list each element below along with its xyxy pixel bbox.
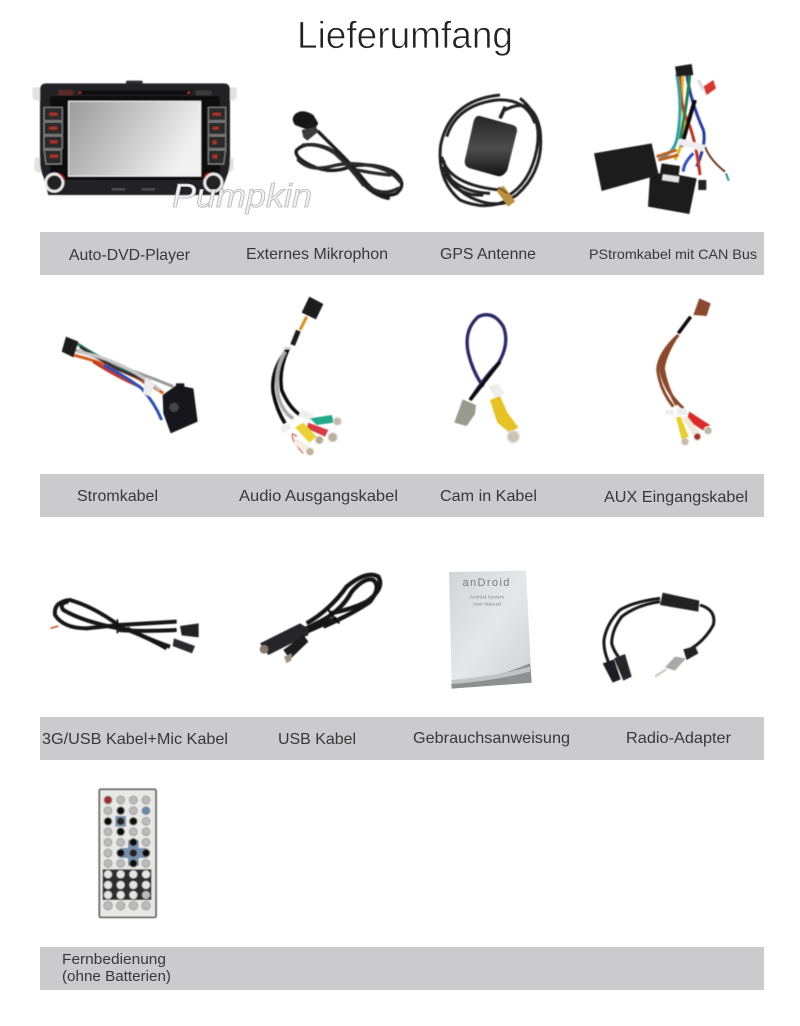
icon: AUX Eingangskabel — [658, 298, 712, 445]
label: 3G/USB Kabel+Mic Kabel: 3G/USB Kabel+Mic Kabel — [42, 731, 228, 748]
icon: 3G/USB cable and mic cable — [51, 600, 199, 653]
manual subtitle: User Manual — [473, 601, 501, 607]
icon: user manual booklet — [449, 571, 532, 689]
label: PStromkabel mit CAN Bus: PStromkabel mit CAN Bus — [589, 246, 757, 262]
icon: Cam in Kabel — [454, 315, 519, 443]
label: Gebrauchsanweisung: Gebrauchsanweisung — [413, 730, 570, 747]
manual subtitle: Android System — [469, 595, 504, 601]
panel: row 3 label bar — [40, 717, 764, 760]
icon: remote control — [99, 789, 156, 917]
icon: external microphone — [293, 111, 402, 198]
icon: car DVD player — [33, 81, 237, 195]
watermark: Pumpkin logo: Pumpkin — [172, 177, 312, 214]
title: Lieferumfang — [297, 15, 513, 57]
label: Fernbedienung (ohne Batterien): (ohne Batterien) — [62, 968, 171, 985]
icon: GPS antenne — [440, 95, 541, 206]
label: Audio Ausgangskabel: Audio Ausgangskabel — [239, 488, 398, 505]
icon: Stromkabel — [62, 337, 198, 433]
icon: power cable with CAN bus — [594, 64, 729, 214]
label: Radio-Adapter: Radio-Adapter — [626, 730, 732, 747]
label: Fernbedienung (ohne Batterien): Fernbedienung — [62, 951, 166, 968]
panel: row 4 label bar — [40, 947, 764, 990]
label: GPS Antenne: GPS Antenne — [440, 246, 536, 263]
left and right buttons — [44, 107, 226, 164]
label: USB Kabel: USB Kabel — [278, 731, 356, 748]
manual cover text: anDroid — [462, 577, 511, 589]
volume and tune knobs — [44, 173, 223, 193]
panel: row 1 label bar — [40, 232, 764, 275]
icon: Audio Ausgangskabel — [273, 297, 341, 455]
icon: radio adapter — [603, 593, 714, 683]
label: Cam in Kabel: Cam in Kabel — [440, 488, 537, 505]
remote buttons — [104, 796, 150, 910]
label: Auto-DVD-Player: Auto-DVD-Player — [69, 247, 191, 264]
label: Stromkabel: Stromkabel — [77, 488, 158, 505]
icon: USB cable — [260, 575, 380, 663]
label: Externes Mikrophon: Externes Mikrophon — [246, 246, 388, 263]
label: AUX Eingangskabel: AUX Eingangskabel — [604, 489, 748, 506]
panel: row 2 label bar — [40, 474, 764, 517]
